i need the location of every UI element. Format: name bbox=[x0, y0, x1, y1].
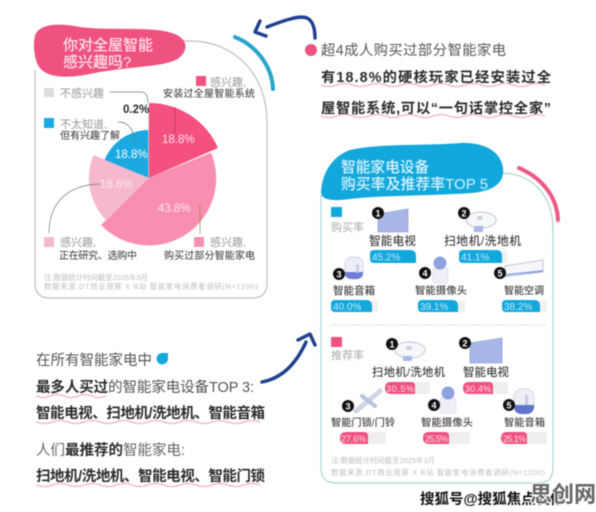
legend: bought some: 购买过部分智能家电 bbox=[164, 249, 255, 262]
item: smart camera: 4 bbox=[431, 400, 437, 410]
panel: interest in whole-home smart systems bbox=[34, 25, 267, 298]
callout: top-right text: 屋智能系统,可以“一句话掌控全家” bbox=[321, 99, 551, 117]
item: robot vacuum: 1 bbox=[389, 340, 395, 350]
section: purchase rate bbox=[331, 207, 547, 313]
legend: bought some: 感兴趣, bbox=[210, 235, 246, 249]
item: smart camera: 4 bbox=[422, 268, 428, 278]
legend: unsure but curious bbox=[44, 117, 135, 145]
item: robot vacuum: 扫地机/洗地机 bbox=[372, 365, 446, 379]
bullet bbox=[305, 44, 317, 56]
item: smart camera bbox=[421, 386, 473, 444]
item: smart speaker bbox=[501, 389, 547, 444]
item: robot vacuum bbox=[372, 338, 446, 394]
item: smart lock: 27.6% bbox=[341, 434, 366, 444]
item: smart lock bbox=[331, 391, 395, 444]
text block: lower-left summary bbox=[36, 352, 266, 486]
arrow: to device panel bbox=[262, 334, 315, 382]
heading blob bbox=[321, 143, 503, 200]
item: smart camera: 39.1% bbox=[420, 302, 448, 313]
legend: installed whole-home: 安装过全屋智能系统 bbox=[163, 87, 255, 100]
section: recommendation rate: 推荐率 bbox=[331, 348, 364, 362]
heading: 感兴趣吗? bbox=[63, 54, 131, 71]
item: smart camera: 智能摄像头 bbox=[415, 284, 467, 297]
item: smart TV bbox=[369, 207, 416, 264]
callout: top-right text: 有18.8%的硬核玩家已经安装过全 bbox=[321, 68, 552, 86]
callout: top-right text: 超4成人购买过部分智能家电 bbox=[321, 42, 506, 59]
card outline bbox=[35, 41, 267, 298]
item: smart TV: 30.4% bbox=[465, 384, 491, 394]
item: smart speaker: 智能音箱 bbox=[504, 416, 545, 429]
icon: blue drop bbox=[157, 353, 168, 364]
card outline bbox=[321, 173, 553, 483]
pie chart: 18.6% bbox=[100, 179, 133, 191]
legend bbox=[331, 207, 342, 217]
source note: 注:数据统计时间截至2025年3月 bbox=[331, 456, 435, 465]
item: smart speaker bbox=[331, 257, 378, 313]
legend: researching: 感兴趣, bbox=[60, 235, 96, 249]
item: smart TV: 智能电视 bbox=[369, 234, 416, 248]
item: smart speaker: 3 bbox=[336, 270, 342, 280]
item: smart air conditioner: 38.2% bbox=[504, 302, 532, 313]
section: recommendation rate bbox=[331, 337, 547, 444]
legend: installed whole-home bbox=[163, 75, 255, 133]
heading: 智能家电设备 bbox=[341, 158, 429, 176]
text block: lower-left summary: 智能电视、扫地机/洗地机、智能音箱 bbox=[36, 404, 265, 422]
legend: not interested bbox=[44, 86, 149, 116]
pie chart: 18.8% bbox=[115, 149, 148, 161]
legend: researching bbox=[44, 184, 137, 262]
item: smart camera: 智能摄像头 bbox=[421, 416, 473, 429]
legend: not interested: 0.2% bbox=[123, 104, 149, 116]
item: smart camera bbox=[415, 256, 467, 313]
legend: unsure but curious: 但有兴趣了解 bbox=[60, 129, 120, 142]
text block: lower-left summary: 人们最推荐的智能家电: bbox=[36, 441, 185, 459]
item: smart speaker: 智能音箱 bbox=[333, 284, 375, 297]
decorative arc: teal bbox=[235, 37, 273, 89]
item: smart speaker: 40.0% bbox=[333, 302, 361, 313]
item: robot vacuum bbox=[444, 207, 521, 264]
item: robot vacuum: 2 bbox=[461, 208, 467, 218]
item: smart lock: 3 bbox=[345, 402, 351, 412]
legend: researching: 正在研究、选购中 bbox=[59, 249, 137, 262]
item: smart air conditioner bbox=[494, 260, 547, 313]
legend: unsure but curious: 不太知道, bbox=[60, 117, 107, 131]
legend bbox=[331, 337, 342, 347]
heading: 你对全屋智能 bbox=[63, 36, 153, 54]
panel: purchase and recommendation TOP 5 bbox=[321, 143, 553, 483]
pie chart bbox=[89, 103, 218, 245]
item: smart TV: 45.2% bbox=[372, 252, 400, 264]
source note: 数据来源:DT商业观察 X B站 智能家电消费者调研(N=1200) bbox=[44, 282, 258, 291]
callout: top-right text bbox=[305, 42, 552, 118]
text block: lower-left summary: 在所有智能家电中 bbox=[36, 352, 152, 369]
item: smart lock: 智能门锁/门铃 bbox=[331, 416, 395, 429]
heading blob bbox=[34, 25, 185, 77]
item: smart TV: 智能电视 bbox=[463, 365, 510, 379]
item: smart air conditioner: 5 bbox=[497, 268, 503, 278]
watermark: 思创网 bbox=[530, 482, 596, 507]
text block: lower-left summary: 最多人买过的智能家电设备TOP 3: bbox=[36, 378, 254, 396]
source note: 数据来源:DT商业观察 X B站 智能家电消费者调研(N=1200) bbox=[331, 468, 545, 477]
item: robot vacuum: 30.5% bbox=[386, 384, 414, 394]
legend: installed whole-home: 感兴趣, bbox=[210, 75, 246, 89]
heading: 购买率及推荐率TOP 5 bbox=[341, 176, 488, 193]
pie chart: 43.8% bbox=[158, 203, 191, 215]
item: smart TV bbox=[459, 337, 510, 394]
item: smart air conditioner: 智能空调 bbox=[504, 284, 544, 297]
pie chart: 18.8% bbox=[162, 134, 195, 146]
legend: not interested: 不感兴趣 bbox=[60, 86, 104, 100]
item: smart TV: 2 bbox=[462, 338, 468, 348]
item: smart speaker: 5 bbox=[506, 400, 512, 410]
item: smart camera: 25.5% bbox=[425, 434, 448, 444]
item: robot vacuum: 扫地机/洗地机 bbox=[444, 234, 521, 248]
watermark bbox=[420, 482, 596, 508]
item: smart TV: 1 bbox=[375, 208, 381, 218]
item: smart speaker: 25.1% bbox=[503, 434, 526, 444]
arrow: to top-right text bbox=[255, 17, 315, 38]
legend: bought some bbox=[164, 204, 255, 262]
decorative arc: pink bbox=[519, 168, 558, 220]
section: purchase rate: 购买率 bbox=[331, 220, 364, 234]
source note: 注:数据统计时间截至2025年3月 bbox=[44, 273, 148, 282]
item: robot vacuum: 41.1% bbox=[461, 252, 489, 264]
watermark: 搜狐号@搜狐焦点装修 bbox=[420, 490, 565, 508]
text block: lower-left summary: 扫地机/洗地机、智能电视、智能门锁 bbox=[36, 467, 266, 485]
